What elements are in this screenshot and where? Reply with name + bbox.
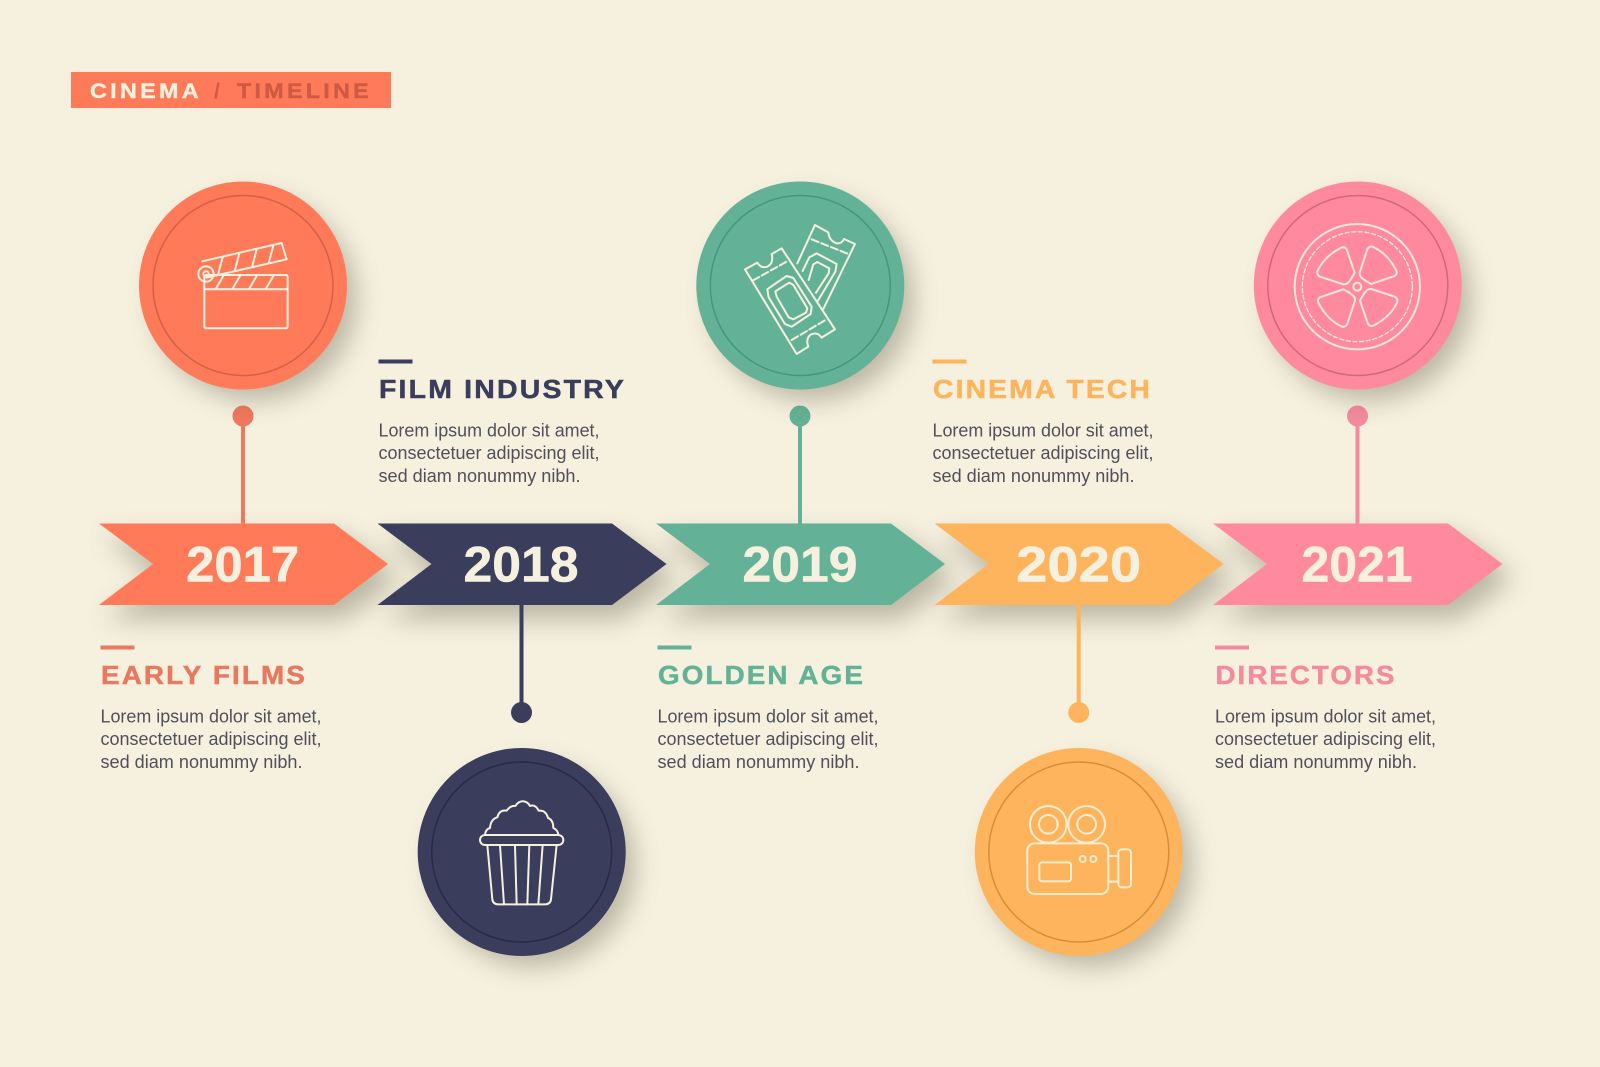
text block: film industry: FILM INDUSTRY — [379, 374, 626, 404]
icon: clapperboard — [198, 243, 288, 328]
title badge: CINEMA — [90, 80, 202, 103]
panel: 2018 circle with popcorn — [418, 748, 634, 966]
milestone 2017 connector — [232, 406, 254, 526]
text block: early films: sed diam nonummy nibh. — [100, 752, 302, 772]
text block: golden age — [658, 646, 878, 772]
panel: 2020 circle with camera — [975, 748, 1192, 966]
text block: golden age: Lorem ipsum dolor sit amet, — [658, 706, 878, 726]
icon: popcorn — [480, 801, 563, 904]
arrow 2017 — [99, 524, 388, 605]
icon: film reel — [1295, 224, 1420, 349]
text block: cinema tech — [932, 360, 1154, 486]
title badge: TIMELINE — [237, 80, 372, 103]
text block: early films: Lorem ipsum dolor sit amet, — [100, 706, 322, 726]
text block: cinema tech: sed diam nonummy nibh. — [932, 466, 1134, 486]
text block: early films: EARLY FILMS — [101, 660, 307, 690]
panel: 2017 circle with clapperboard — [139, 182, 356, 400]
text block: cinema tech: consectetuer adipiscing elit, — [932, 443, 1154, 463]
title badge — [71, 72, 391, 108]
text block: cinema tech: CINEMA TECH — [933, 374, 1152, 404]
arrow 2018: 2018 — [464, 536, 578, 592]
text block: cinema tech: Lorem ipsum dolor sit amet, — [932, 420, 1154, 440]
text block: directors — [1215, 646, 1436, 772]
text block: film industry: sed diam nonummy nibh. — [378, 466, 580, 486]
text block: directors: DIRECTORS — [1216, 660, 1396, 690]
arrow 2021 — [1213, 524, 1502, 605]
text block: golden age: consectetuer adipiscing elit, — [658, 729, 878, 749]
arrow 2021: 2021 — [1302, 536, 1412, 592]
milestone 2019 connector — [790, 406, 810, 526]
text block: film industry: Lorem ipsum dolor sit amet, — [378, 420, 600, 440]
text block: film industry: consectetuer adipiscing elit, — [378, 443, 600, 463]
text block: directors: sed diam nonummy nibh. — [1215, 752, 1417, 772]
panel: 2019 circle with tickets — [696, 182, 913, 400]
icon: movie camera — [1027, 806, 1131, 894]
milestone 2020 connector — [1068, 603, 1089, 723]
arrow 2020 — [935, 524, 1224, 605]
text block: film industry — [378, 360, 626, 486]
title badge: / — [214, 80, 220, 103]
text block: early films: consectetuer adipiscing elit, — [100, 729, 322, 749]
icon: tickets — [745, 225, 855, 354]
text block: golden age: sed diam nonummy nibh. — [658, 752, 860, 772]
text block: directors: consectetuer adipiscing elit, — [1215, 729, 1436, 749]
panel: 2021 circle with film reel — [1254, 182, 1470, 400]
arrow 2018 — [378, 524, 666, 605]
arrow 2019 — [656, 524, 945, 605]
text block: golden age: GOLDEN AGE — [658, 660, 865, 690]
text block: directors: Lorem ipsum dolor sit amet, — [1215, 706, 1436, 726]
arrow 2020: 2020 — [1016, 536, 1141, 592]
milestone 2021 connector — [1347, 406, 1368, 526]
arrow 2017: 2017 — [186, 536, 299, 592]
text block: early films — [100, 646, 322, 772]
milestone 2018 connector — [511, 603, 532, 723]
arrow 2019: 2019 — [742, 536, 858, 592]
